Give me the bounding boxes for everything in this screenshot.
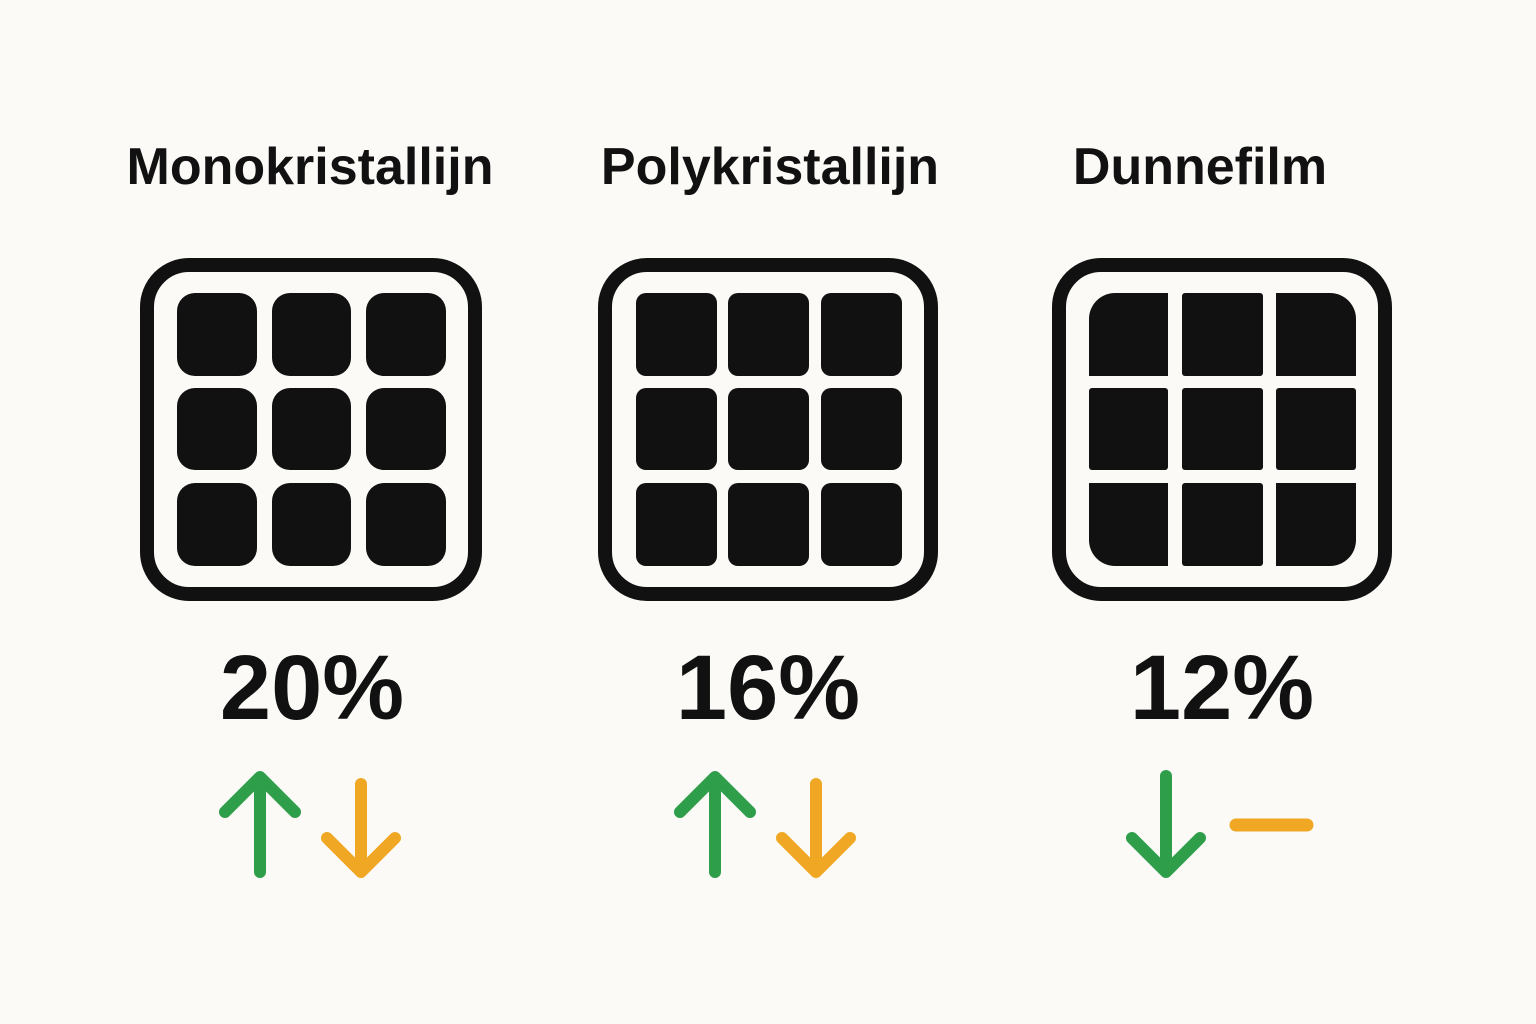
percentage 12%: 12% xyxy=(1130,637,1314,739)
icon: polycrystalline panel xyxy=(605,265,931,594)
title: Dunnefilm: Dunnefilm xyxy=(1073,138,1327,196)
icon: monocrystalline panel xyxy=(147,265,475,594)
arrow: green up xyxy=(225,777,295,872)
marker: orange dash xyxy=(1236,818,1307,832)
title: Monokristallijn: Monokristallijn xyxy=(127,138,493,196)
column: Polykristallijn xyxy=(601,138,939,872)
column: Dunnefilm xyxy=(1059,138,1385,872)
icon: thin-film panel xyxy=(1059,265,1385,594)
arrow: green up xyxy=(680,777,750,872)
arrow: green down xyxy=(1132,776,1200,872)
percentage 20%: 20% xyxy=(220,637,404,739)
arrow: orange down xyxy=(782,784,850,872)
column: Monokristallijn xyxy=(127,138,493,872)
arrow: orange down xyxy=(327,784,395,872)
percentage 16%: 16% xyxy=(676,637,860,739)
title: Polykristallijn: Polykristallijn xyxy=(601,138,939,196)
